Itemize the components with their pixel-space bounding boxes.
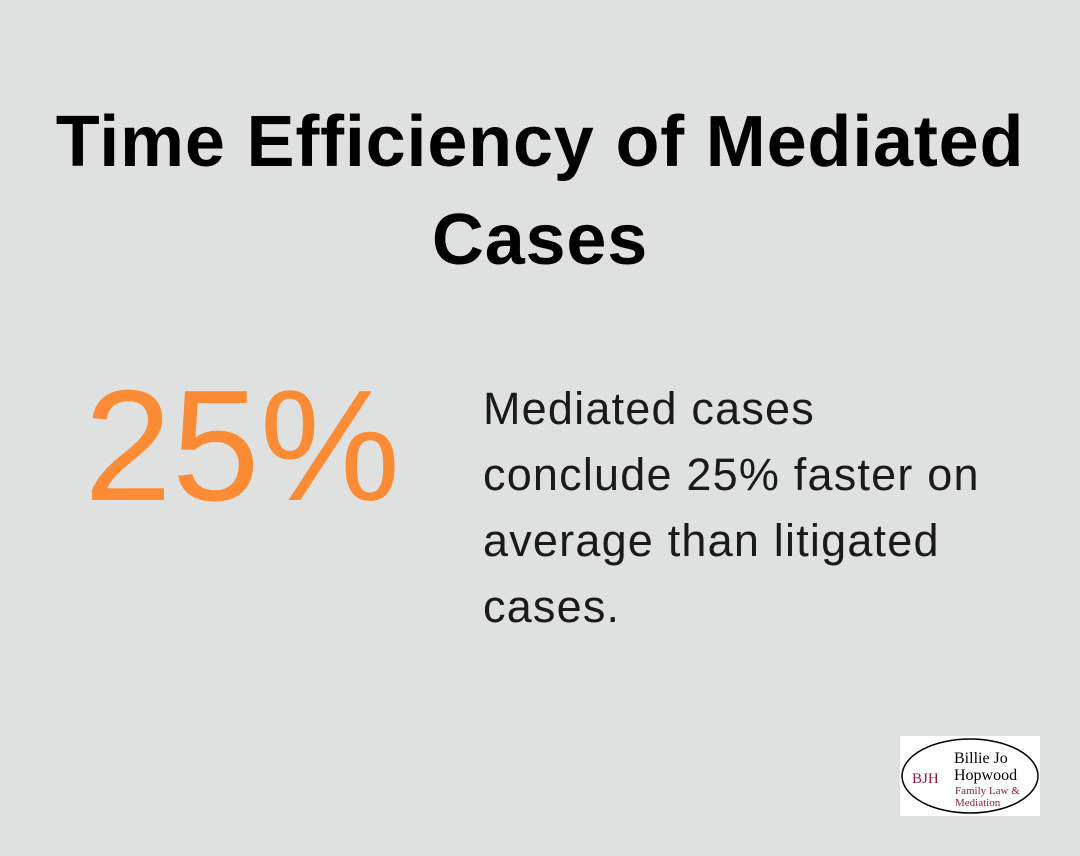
stat: 25%: 25% bbox=[84, 358, 400, 534]
logo: BJH bbox=[912, 771, 939, 787]
title bbox=[56, 102, 1024, 280]
description text bbox=[483, 383, 980, 632]
description text: Mediated cases bbox=[483, 383, 815, 434]
description text: cases. bbox=[483, 581, 620, 632]
title: Time Efficiency of Mediated bbox=[56, 102, 1024, 182]
logo: Hopwood bbox=[954, 767, 1017, 784]
logo: Mediation bbox=[955, 797, 1001, 809]
title: Cases bbox=[432, 200, 648, 280]
description text: average than litigated bbox=[483, 515, 940, 566]
logo: Family Law & bbox=[955, 785, 1020, 797]
logo: Billie Jo bbox=[954, 750, 1008, 767]
logo bbox=[900, 736, 1040, 816]
description text: conclude 25% faster on bbox=[483, 449, 980, 500]
